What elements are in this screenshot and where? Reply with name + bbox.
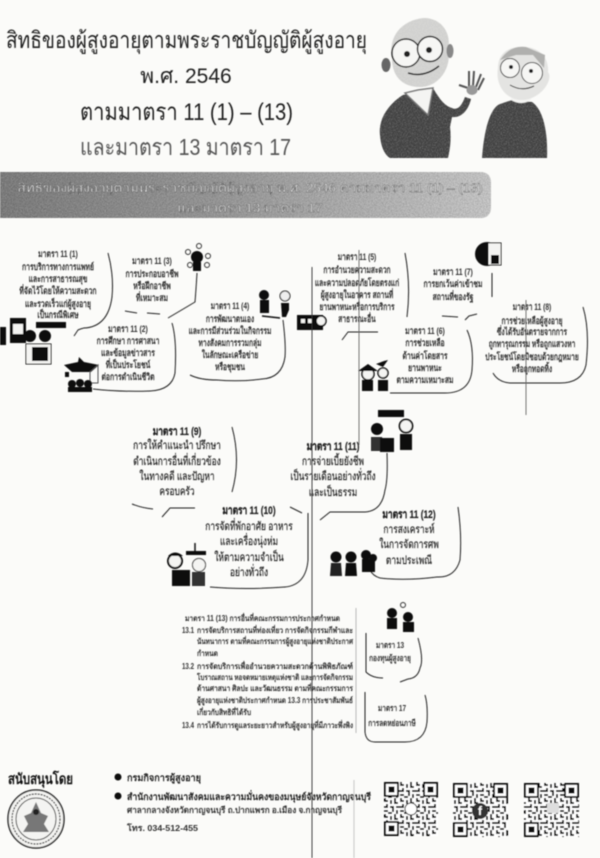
QR code 3	[524, 783, 579, 837]
bubble: section 11 (6): ด้านค่าโดยสาร	[402, 350, 448, 361]
icon: funeral group	[330, 550, 377, 576]
bubble: section 11 (6)	[390, 326, 472, 393]
text block: section 11 (13) list: มาตรา 11 (13) การอื่นที่คณะกรรมการประกาศกำหนด	[185, 612, 340, 623]
bubble: section 11 (1): ที่จัดไว้โดยให้ความสะดวก	[19, 284, 97, 296]
QR code 2	[453, 783, 508, 837]
icon: hospital service people	[0, 318, 66, 364]
title: สิทธิของผู้สูงอายุตามพระราชบัญญัติผู้สูงอายุ	[6, 27, 367, 54]
bubble: section 11 (3): การประกอบอาชีพ	[126, 268, 179, 279]
bubble: section 11 (6): มาตรา 11 (6)	[405, 326, 445, 336]
bubble: section 11 (11): เป็นรายเดือนอย่างทั่วถึง	[290, 467, 376, 483]
phone: โทร. 034-512-455	[126, 823, 198, 833]
icon: state attraction	[475, 242, 501, 266]
bubble: section 11 (7)	[423, 267, 492, 320]
bubble: section 17	[365, 692, 427, 742]
bullet and provincial office: สำนักงานพัฒนาสังคมและความมั่นคงของมนุษย์จังหวัดกาญจนบุรี	[127, 789, 372, 803]
bubble: section 11 (12)	[370, 507, 461, 579]
banner: และมาตรา 13 มาตรา 17	[178, 201, 323, 215]
bubble: section 11 (7): สถานที่ของรัฐ	[433, 290, 474, 303]
bubble: section 11 (3): มาตรา 11 (3)	[132, 256, 172, 266]
banner	[0, 172, 491, 218]
bubble: section 17: การลดหย่อนภาษี	[368, 718, 416, 728]
title: และมาตรา 13 มาตรา 17	[80, 134, 291, 160]
text block: section 11 (13) list: 13.4	[182, 721, 195, 730]
bubble: section 17: มาตรา 17	[378, 703, 406, 713]
bubble: section 11 (7): การยกเว้นค่าเข้าชม	[423, 278, 483, 289]
bubble: section 11 (8)	[485, 302, 587, 383]
bubble: section 11 (4): และการมีส่วนร่วมในกิจกรรม	[189, 325, 271, 336]
text block: section 11 (13) list: ผู้สูงอายุแห่งชาติประกาศกำหนด 13.3 การประชาสัมพันธ์	[197, 695, 353, 706]
bubble: section 11 (11): และเป็นธรรม	[309, 483, 357, 499]
bubble: section 11 (3)	[125, 256, 197, 318]
bubble: section 13	[366, 633, 422, 682]
bubble: section 11 (10): ให้ตามความจำเป็น	[214, 548, 284, 564]
bubble: section 11 (1): และรวดเร็วแก่ผู้สูงอายุ	[25, 297, 91, 310]
bubble: section 11 (5): และความปลอดภัยโดยตรงแก่	[315, 277, 399, 288]
bubble: section 11 (11)	[290, 441, 387, 520]
QR code 1	[384, 782, 438, 836]
bubble: section 11 (10): และเครื่องนุ่งห่ม	[220, 532, 278, 548]
bubble: section 11 (5): การอำนวยความสะดวก	[323, 264, 391, 275]
text block: section 11 (13) list: กำหนด	[197, 649, 218, 658]
bubble: section 11 (4): การพัฒนาตนเอง	[206, 314, 254, 324]
bubble: section 11 (2): มาตรา 11 (2)	[108, 324, 148, 334]
bubble: section 11 (1): มาตรา 11 (1)	[38, 249, 78, 259]
bubble: section 11 (12): ตามประเพณี	[386, 554, 432, 567]
icon: house and family	[64, 357, 99, 392]
bubble: section 11 (9): มาตรา 11 (9)	[153, 426, 201, 438]
bubble: section 11 (4): ในลักษณะเครือข่าย	[202, 349, 258, 360]
bullet and department: กรมกิจการผู้สูงอายุ	[127, 772, 201, 785]
bubble: section 11 (8): ซึ่งได้รับอันตรายจากการ	[497, 325, 568, 337]
icon: two people talking	[259, 290, 290, 318]
title: พ.ศ. 2546	[140, 65, 232, 88]
bubble: section 11 (5): ผู้สูงอายุในอาคาร สถานที่	[321, 288, 394, 301]
text block: section 11 (13) list: เกี่ยวกับสิทธิที่ได้รับ	[197, 706, 251, 717]
bubble: section 11 (4)	[189, 301, 285, 381]
bubble: section 11 (6): การช่วยเหลือ	[405, 337, 445, 348]
bubble: section 11 (10): มาตรา 11 (10)	[222, 505, 276, 517]
text block: section 11 (13) list: การได้รับการดูแลระยะยาวสำหรับผู้สูงอายุที่มีภาวะพึ่งพิง	[197, 719, 353, 731]
text block: section 11 (13) list: ด้านศาสนา ศิลปะ และวัฒนธรรม ตามที่คณะกรรมการ	[197, 682, 354, 693]
text block: section 11 (13) list: โบราณสถาน หอจดหมายเหตุแห่งชาติ และการจัดกิจกรรม	[196, 672, 353, 683]
icon: building	[297, 315, 326, 330]
text block: section 11 (13) list: 13.1	[182, 626, 195, 635]
title: ตามมาตรา 11 (1) – (13)	[80, 99, 293, 126]
bubble: section 11 (2): ที่เป็นประโยชน์	[106, 358, 151, 370]
text block: sponsors	[114, 772, 372, 833]
text block: section 11 (13) list: การจัดบริการสถานที่ท่องเที่ยว การจัดกิจกรรมกีฬาและ	[197, 624, 353, 635]
bubble: section 11 (9)	[132, 426, 236, 517]
bubble: section 11 (4): มาตรา 11 (4)	[211, 301, 249, 311]
bubble: section 11 (5): มาตรา 11 (5)	[338, 252, 376, 262]
bubble: section 11 (9): ดำเนินการอื่นที่เกี่ยวข้อง	[133, 452, 221, 468]
address: ศาลากลางจังหวัดกาญจนบุรี ถ.ปากแพรก อ.เมือง จ.กาญจนบุรี	[127, 805, 342, 816]
bubble: section 11 (2): ต่อการดำเนินชีวิต	[101, 371, 155, 382]
text block: section 11 (13) list	[182, 612, 354, 731]
icon: travelling couple	[358, 360, 388, 391]
sponsor heading: สนับสนุนโดย	[8, 770, 73, 788]
bubble: section 11 (4): หรือชุมชน	[215, 361, 245, 373]
bubble: section 13: กองทุนผู้สูงอายุ	[369, 653, 411, 664]
bubble: section 11 (2): การศึกษา การศาสนา	[97, 335, 160, 346]
title	[6, 27, 367, 160]
bubble: section 11 (6): ตามความเหมาะสม	[396, 375, 454, 385]
icon: government seal	[8, 790, 64, 848]
bubble: section 11 (11): การจ่ายเบี้ยยังชีพ	[302, 452, 364, 468]
text block: section 11 (13) list: 13.2	[182, 662, 195, 671]
bubble: section 11 (5): สาธารณะอื่น	[338, 312, 376, 324]
bubble: section 11 (9): การให้คำแนะนำ ปรึกษา	[133, 439, 221, 452]
bubble: section 11 (1)	[19, 249, 113, 336]
icon: pension desk	[371, 410, 412, 452]
icon: housing and food	[168, 543, 206, 586]
icon: two elderly with fund	[387, 602, 414, 632]
bubble: section 11 (2)	[93, 323, 176, 391]
bubble: section 11 (8): มาตรา 11 (8)	[513, 302, 551, 312]
bubble: section 11 (8): การช่วยเหลือผู้สูงอายุ	[502, 315, 563, 327]
bubble: section 11 (7): มาตรา 11 (7)	[433, 267, 473, 277]
illustration: elderly couple	[380, 18, 549, 158]
bubble: section 11 (4): ทางสังคมการรวมกลุ่ม	[199, 338, 261, 349]
bubble: section 11 (10): อย่างทั่วถึง	[230, 563, 268, 579]
icon: occupation idea	[186, 244, 210, 271]
woman	[482, 47, 549, 158]
bubble: section 11 (5): ยานพาหนะหรือการบริการ	[319, 301, 395, 312]
bubble: section 11 (1): เป็นกรณีพิเศษ	[37, 308, 79, 320]
QR code 2: f	[478, 804, 483, 818]
bubble: section 11 (8): ถูกทารุณกรรม หรือถูกแสวงหา	[489, 338, 575, 350]
banner: สิทธิของผู้สูงอายุตามพระราชบัญญัติผู้สูงอายุ พ.ศ. 2546 ตามมาตรา 11 (1) – (13)	[18, 181, 482, 196]
bubble: section 11 (12): ในการจัดการศพ	[379, 538, 439, 551]
bubble: section 11 (8): หรือถูกทอดทิ้ง	[512, 360, 552, 375]
man	[380, 18, 484, 158]
bubble: section 11 (2): และข้อมูลข่าวสาร	[101, 347, 155, 359]
bubble: section 11 (6): ยานพาหนะ	[408, 363, 442, 373]
text block: section 11 (13) list: นันทนาการ ตามที่คณะกรรมการผู้สูงอายุแห่งชาติประกาศ	[197, 635, 354, 647]
bubble: section 11 (5)	[315, 252, 409, 340]
bubble: section 11 (1): และการสาธารณสุข	[29, 274, 88, 285]
bubble: section 11 (8): ประโยชน์โดยมิชอบด้วยกฎหมาย	[485, 351, 579, 362]
bubble: section 11 (10): การจัดที่พักอาศัย อาหาร	[205, 517, 293, 533]
bubble: section 11 (12): มาตรา 11 (12)	[382, 509, 436, 521]
bubble: section 11 (11): มาตรา 11 (11)	[307, 441, 359, 453]
bubble: section 11 (3): ที่เหมาะสม	[136, 291, 168, 303]
bubble: section 11 (10)	[205, 505, 308, 588]
bubble: section 11 (12): การสงเคราะห์	[383, 523, 435, 536]
bubble: section 11 (1): การบริการทางการแพทย์	[22, 261, 94, 272]
text block: section 11 (13) list: การจัดบริการเพื่ออำนวยความสะดวกด้านพิพิธภัณฑ์	[197, 660, 353, 671]
bubble: section 11 (3): หรือฝึกอาชีพ	[133, 280, 171, 291]
bubble: section 13: มาตรา 13	[376, 640, 404, 650]
bubble: section 11 (9): ครอบครัว	[159, 486, 195, 498]
bubble: section 11 (9): ในทางคดี และปัญหา	[139, 470, 215, 483]
